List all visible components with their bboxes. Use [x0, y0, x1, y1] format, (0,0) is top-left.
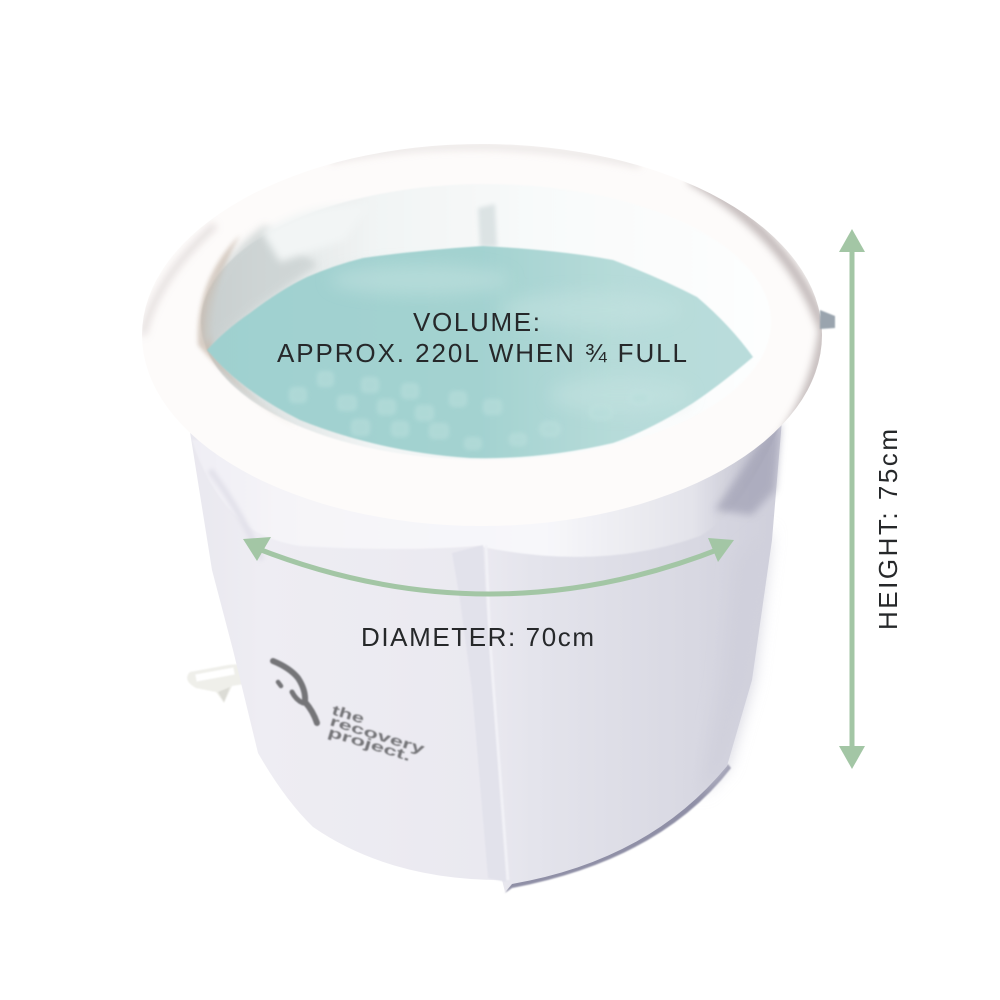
tub upper flap [192, 420, 782, 557]
logo wordmark: project. [326, 724, 413, 764]
ice cubes [290, 372, 650, 449]
diameter arrow [243, 537, 734, 594]
left wall fold highlight [262, 204, 370, 262]
flap shadow folds [210, 470, 262, 560]
tub body [190, 420, 782, 892]
logo wordmark: the [330, 702, 367, 727]
drain tube [187, 664, 244, 703]
height arrow [839, 229, 865, 769]
tub base edge [505, 764, 731, 893]
inner wall [201, 184, 771, 460]
volume label: VOLUME: [413, 307, 540, 337]
seam line [486, 545, 508, 880]
left inner rim shadow [198, 235, 300, 430]
volume label: APPROX. 220L WHEN ¾ FULL [277, 338, 687, 368]
water [207, 246, 753, 458]
wall folds [478, 204, 497, 247]
outer rim [142, 144, 822, 526]
right dark under rim [715, 422, 781, 515]
logo mark [273, 661, 317, 723]
right side shading [700, 530, 770, 795]
fold strip [452, 545, 506, 882]
logo wordmark: recovery [328, 713, 427, 757]
height label: HEIGHT: 75cm [873, 429, 903, 630]
ice bath tub [142, 144, 835, 893]
logo wordmark [326, 702, 427, 764]
volume label [277, 307, 687, 368]
water light patches [330, 265, 690, 413]
right valve [820, 310, 835, 329]
left inner shadow [205, 225, 318, 345]
diameter label: DIAMETER: 70cm [361, 622, 594, 652]
rim edge shading [143, 146, 824, 455]
